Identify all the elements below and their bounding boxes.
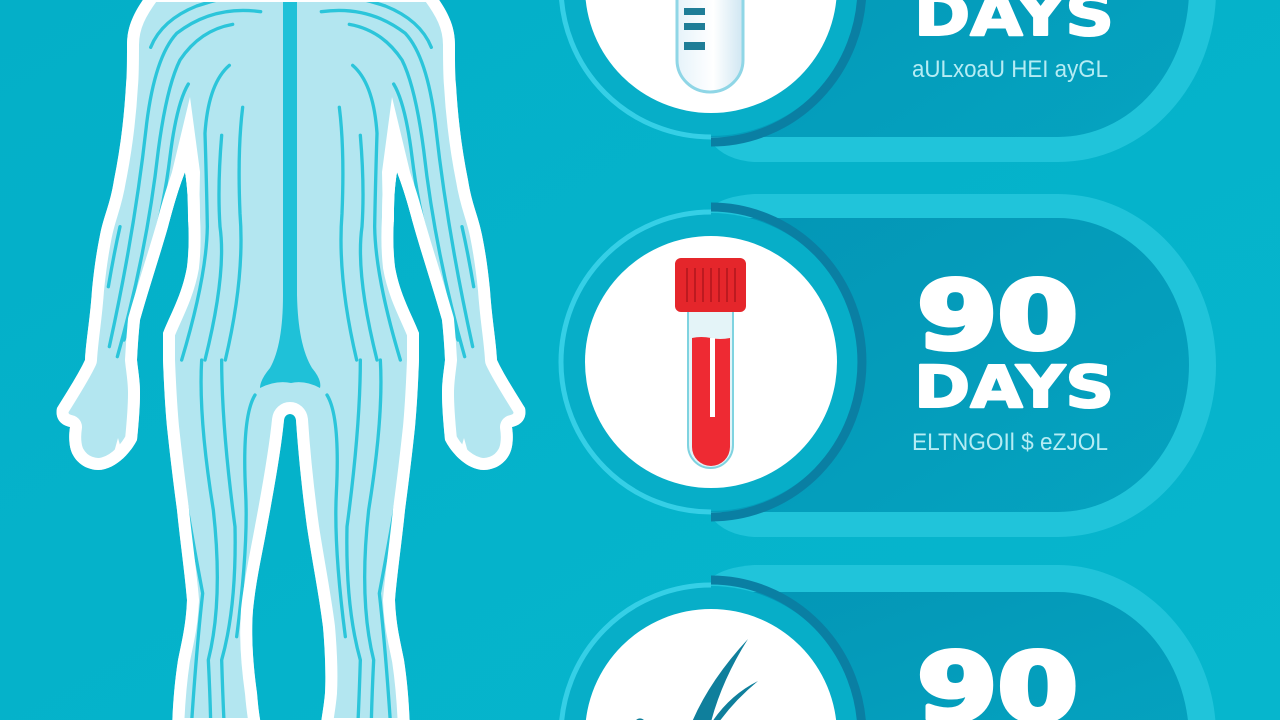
highlight: [710, 338, 715, 417]
white circle: [585, 0, 837, 113]
glass: [688, 310, 733, 468]
human body figure: [40, 0, 550, 720]
icon ring: [562, 0, 860, 136]
dark arc: [711, 580, 862, 720]
icon ring: [562, 213, 860, 511]
white armpit wedges: [158, 97, 424, 222]
inner dark pill: [711, 218, 1189, 512]
inner dark pill: [711, 592, 1189, 720]
outer light pill: [711, 565, 1216, 720]
body fill: [40, 0, 550, 720]
spine: [260, 0, 320, 388]
white finger notches: [113, 438, 469, 460]
outer light pill: [711, 0, 1216, 162]
icon: hair strands: [636, 639, 758, 720]
white circle: [585, 236, 837, 488]
cap: [675, 258, 746, 312]
cap ribs: [687, 268, 735, 302]
left side body lines: [108, 0, 261, 360]
label: DAYS: DAYS: [914, 353, 1114, 421]
number: 90: [917, 262, 1078, 371]
right leg lines: [327, 360, 404, 720]
body white outline: [57, 0, 525, 720]
light arc: [561, 585, 711, 720]
left leg lines: [178, 360, 255, 720]
white circle: [585, 609, 837, 720]
outer light pill: [711, 194, 1216, 537]
caption: ELTNGOIl $ eZJOL: [912, 429, 1108, 456]
icon: test tube: [677, 0, 743, 92]
blood: [692, 337, 730, 466]
panel: bottom 90 days: [561, 565, 1216, 720]
panel: middle 90 days: [561, 194, 1216, 537]
light arc: [561, 0, 711, 137]
right side body lines: [321, 0, 474, 360]
icon: blood tube: [675, 258, 746, 468]
dark arc: [711, 0, 862, 142]
panel: top 90 days: [561, 0, 1216, 162]
icon ring: [562, 586, 860, 720]
caption: aULxoaU HEI ayGL: [912, 56, 1108, 83]
inner dark pill: [711, 0, 1189, 137]
dark arc: [711, 207, 862, 517]
light arc: [561, 212, 711, 512]
